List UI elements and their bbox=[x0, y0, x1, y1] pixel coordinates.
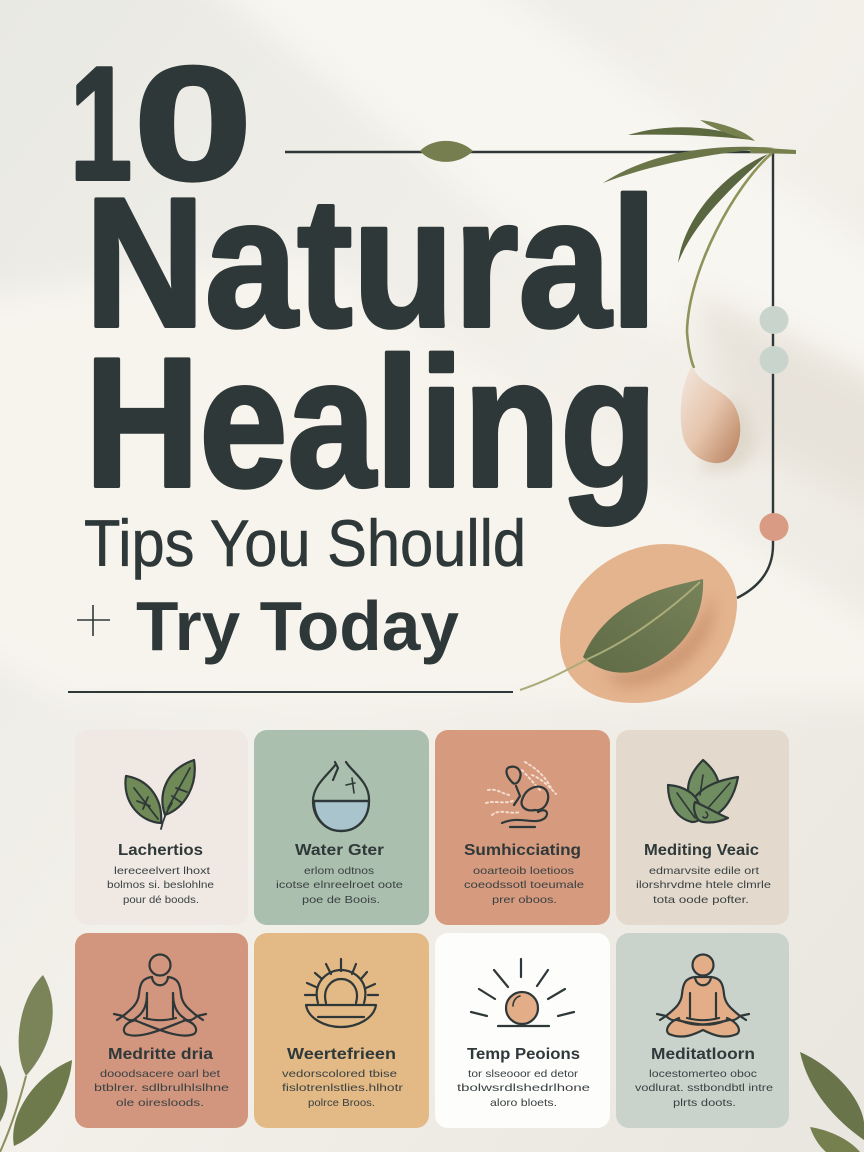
heading: Lachertios bbox=[118, 842, 203, 859]
bud on the line bbox=[420, 141, 473, 162]
panel: card 4 bbox=[616, 730, 789, 925]
heading: Mediting Veaic bbox=[644, 842, 759, 859]
icon: meditating figure outline bbox=[114, 954, 206, 1036]
body text bbox=[636, 865, 771, 906]
icon: abstract figure with speckles bbox=[486, 762, 556, 827]
heading: Sumhicciating bbox=[464, 842, 581, 859]
body text: tor slseooor ed detor bbox=[468, 1068, 579, 1080]
body text: btblrer. sdlbrulhlslhne bbox=[94, 1082, 229, 1094]
body text: coeodssotl toeumale bbox=[464, 879, 584, 891]
heading: Weertefrieen bbox=[287, 1046, 396, 1063]
subtitle: Tips You Should: Tips You Shoulld bbox=[84, 506, 526, 580]
title: 10: 1 bbox=[70, 34, 132, 214]
body text: vedorscolored tbise bbox=[282, 1068, 397, 1080]
rule under title bbox=[68, 691, 513, 693]
body text: prer oboos. bbox=[492, 894, 557, 906]
title: Natural: Natural bbox=[85, 159, 657, 365]
icon: meditating figure filled bbox=[657, 954, 749, 1037]
body text: polrce Broos. bbox=[308, 1097, 375, 1109]
body text: aloro bloets. bbox=[490, 1097, 557, 1109]
body text bbox=[94, 1068, 229, 1109]
title: 10 bbox=[70, 34, 252, 214]
icon: lotus leaves bbox=[668, 760, 738, 822]
icon: water drop bbox=[313, 762, 369, 831]
body text: poe de Boois. bbox=[302, 894, 380, 906]
plant sprig with bud bbox=[603, 120, 796, 472]
panel: card 1 bbox=[75, 730, 248, 925]
plus mark bbox=[77, 605, 110, 636]
title: Healing: Healing bbox=[85, 319, 657, 525]
body text: pour dé boods. bbox=[123, 894, 199, 906]
body text: ooarteoib loetioos bbox=[473, 865, 574, 877]
panel: card 8 bbox=[616, 933, 789, 1128]
body text: tbolwsrdlshedrlhone bbox=[457, 1082, 590, 1094]
corner leaves: bottom left bbox=[0, 975, 72, 1152]
body text bbox=[457, 1068, 590, 1109]
body text bbox=[464, 865, 584, 906]
body text: erlom odtnos bbox=[304, 865, 374, 877]
body text: vodlurat. sstbondbtl intre bbox=[635, 1082, 773, 1094]
body text bbox=[107, 865, 214, 906]
body text: icotse elnreelroet oote bbox=[276, 879, 403, 891]
body text bbox=[276, 865, 403, 906]
subtitle: Try Today: Try Today bbox=[136, 587, 459, 665]
body text: lereceelvert lhoxt bbox=[114, 865, 210, 877]
panel: card 5 bbox=[75, 933, 248, 1128]
panel: card 3 bbox=[435, 730, 610, 925]
heading: Water Gter bbox=[295, 842, 384, 859]
body text: ilorshrvdme htele clmrle bbox=[636, 879, 771, 891]
icon: two leaves bbox=[125, 760, 195, 829]
body text: bolmos si. beslohlne bbox=[107, 879, 214, 891]
body text bbox=[282, 1068, 404, 1109]
body text: locestomerteo oboc bbox=[649, 1068, 757, 1080]
icon: glowing ball with rays bbox=[471, 959, 574, 1026]
body text: dooodsacere oarl bet bbox=[100, 1068, 220, 1080]
heading: Meditatloorn bbox=[651, 1046, 755, 1063]
body text: fislotrenlstlies.hlhotr bbox=[282, 1082, 404, 1094]
peach blob with leaf bbox=[520, 544, 737, 703]
heading: Medritte dria bbox=[108, 1046, 213, 1063]
body text bbox=[635, 1068, 773, 1109]
title: 10: 0 bbox=[134, 34, 252, 214]
corner leaves: bottom right bbox=[800, 1052, 864, 1152]
body text: plrts doots. bbox=[673, 1097, 736, 1109]
body text: edmarvsite edile ort bbox=[649, 865, 759, 877]
panel: card 7 bbox=[435, 933, 610, 1128]
heading: Temp Peoions bbox=[467, 1046, 580, 1063]
panel: card 6 bbox=[254, 933, 429, 1128]
panel: card 2 bbox=[254, 730, 429, 925]
body text: ole oiresloods. bbox=[116, 1097, 204, 1109]
frame line with dots bbox=[285, 152, 788, 598]
icon: sun over bowl bbox=[305, 959, 378, 1027]
body text: tota oode pofter. bbox=[653, 894, 749, 906]
